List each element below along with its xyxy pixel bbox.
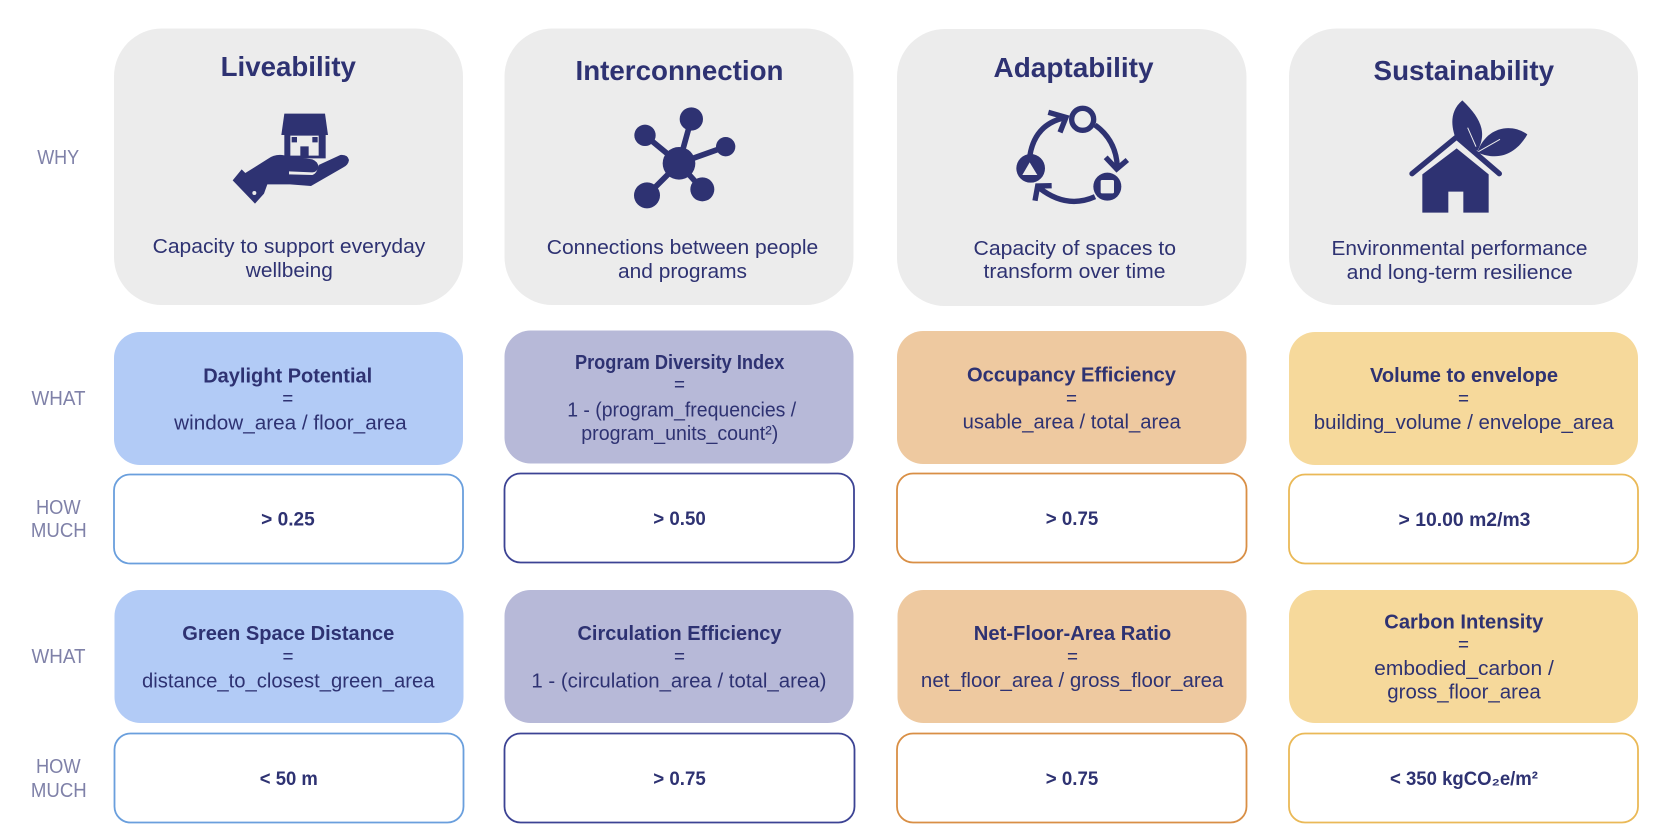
icon: house with leaves — [1412, 100, 1527, 213]
panel: daylight potential threshold — [114, 474, 463, 564]
panel: green space distance threshold — [114, 734, 464, 822]
panel: program diversity threshold — [504, 474, 854, 562]
label: how much row 2 — [31, 756, 87, 802]
panel: carbon intensity metric: Carbon Intensity — [1384, 611, 1544, 633]
panel: circulation efficiency threshold: > 0.75 — [653, 769, 706, 790]
panel: volume to envelope metric — [1289, 332, 1638, 465]
label: why: WHY — [37, 147, 79, 169]
label: how much row 1: HOW — [36, 497, 81, 519]
panel: daylight potential metric: Daylight Potential — [203, 365, 372, 387]
icon: hand holding house — [233, 114, 349, 204]
description: liveability: Capacity to support everyday — [153, 236, 425, 258]
heading: sustainability: Sustainability — [1374, 55, 1554, 86]
icon: network nodes — [634, 107, 735, 208]
panel: circulation efficiency metric: 1 - (circulation_area / total_area) — [531, 670, 826, 692]
panel: green space distance metric: = — [282, 646, 294, 668]
panel: volume to envelope threshold: > 10.00 m2/m3 — [1399, 510, 1530, 531]
panel: program diversity metric: program_units_count²) — [581, 423, 778, 445]
panel: occupancy efficiency metric: Occupancy Efficiency — [967, 365, 1177, 387]
panel: circulation efficiency metric — [504, 590, 854, 723]
panel: carbon intensity metric — [1289, 590, 1638, 723]
panel: circulation efficiency metric: Circulation Efficiency — [578, 623, 782, 645]
panel: daylight potential metric — [114, 332, 463, 465]
panel: green space distance metric: distance_to_closest_green_area — [142, 670, 435, 692]
label: how much row 2: HOW — [36, 756, 81, 778]
panel: carbon intensity threshold — [1289, 734, 1638, 822]
heading: liveability: Liveability — [221, 51, 356, 82]
description: interconnection — [547, 237, 818, 283]
panel: volume to envelope threshold — [1289, 474, 1638, 564]
panel: program diversity metric: = — [674, 374, 685, 396]
row labels — [31, 147, 87, 802]
description: sustainability: Environmental performance — [1332, 238, 1588, 260]
description: adaptability: Capacity of spaces to — [974, 238, 1176, 260]
panel: net floor area ratio metric: Net-Floor-Area Ratio — [974, 623, 1171, 645]
panel: carbon intensity metric: = — [1458, 634, 1469, 656]
panel: occupancy efficiency metric: usable_area / total_area — [963, 411, 1182, 433]
label: what row 2: WHAT — [32, 646, 86, 668]
description: interconnection: and programs — [618, 261, 747, 283]
panel: circulation efficiency threshold — [504, 734, 854, 822]
panel: occupancy efficiency threshold: > 0.75 — [1046, 509, 1099, 530]
panel: net floor area ratio threshold: > 0.75 — [1046, 769, 1099, 790]
panel: daylight potential threshold: > 0.25 — [261, 510, 315, 531]
panel: occupancy efficiency threshold — [897, 474, 1246, 562]
panel: green space distance metric: Green Space Distance — [182, 623, 394, 645]
panel: net floor area ratio metric: = — [1067, 646, 1078, 668]
panel: green space distance metric — [114, 590, 464, 723]
panel: program diversity metric — [504, 330, 854, 464]
label: how much row 1: MUCH — [31, 520, 87, 542]
heading: interconnection: Interconnection — [576, 55, 784, 86]
panel: program diversity threshold: > 0.50 — [653, 509, 706, 530]
panel: adaptability why card — [897, 29, 1246, 306]
panel: net floor area ratio threshold — [897, 734, 1246, 822]
description: adaptability: transform over time — [984, 261, 1166, 283]
label: how much row 2: MUCH — [31, 780, 87, 802]
panel: sustainability why card — [1289, 28, 1638, 305]
panel: volume to envelope metric: = — [1458, 388, 1469, 410]
icon: transformation cycle — [1016, 108, 1127, 201]
panel: occupancy efficiency metric: = — [1066, 388, 1077, 410]
description: sustainability: and long-term resilience — [1347, 262, 1573, 284]
panel: green space distance threshold: < 50 m — [260, 769, 318, 790]
description: liveability — [153, 236, 425, 282]
panel: volume to envelope metric: Volume to envelope — [1370, 365, 1558, 387]
panel: carbon intensity metric: embodied_carbon / — [1374, 658, 1554, 680]
panel: carbon intensity threshold: < 350 kgCO₂e/m² — [1390, 769, 1538, 790]
panel: net floor area ratio metric — [898, 590, 1246, 723]
panel: program diversity metric: 1 - (program_frequencies / — [567, 400, 797, 422]
description: interconnection: Connections between people — [547, 237, 818, 259]
heading: adaptability: Adaptability — [994, 52, 1154, 83]
panel: volume to envelope metric: building_volume / envelope_area — [1314, 412, 1615, 434]
panel: carbon intensity metric: gross_floor_area — [1387, 681, 1542, 703]
panel: interconnection why card — [504, 28, 854, 305]
description: liveability: wellbeing — [245, 260, 333, 282]
description: sustainability — [1332, 238, 1588, 284]
panel: program diversity metric: Program Diversity Index — [575, 352, 784, 374]
label: what row 1: WHAT — [32, 388, 86, 410]
panel: daylight potential metric: = — [282, 388, 293, 410]
panel: daylight potential metric: window_area / floor_area — [173, 412, 408, 434]
panel: net floor area ratio metric: net_floor_area / gross_floor_area — [921, 670, 1224, 692]
panel: occupancy efficiency metric — [897, 331, 1246, 464]
panel: circulation efficiency metric: = — [674, 646, 685, 668]
panel: liveability why card — [114, 28, 463, 305]
label: how much row 1 — [31, 497, 87, 542]
description: adaptability — [974, 238, 1176, 283]
